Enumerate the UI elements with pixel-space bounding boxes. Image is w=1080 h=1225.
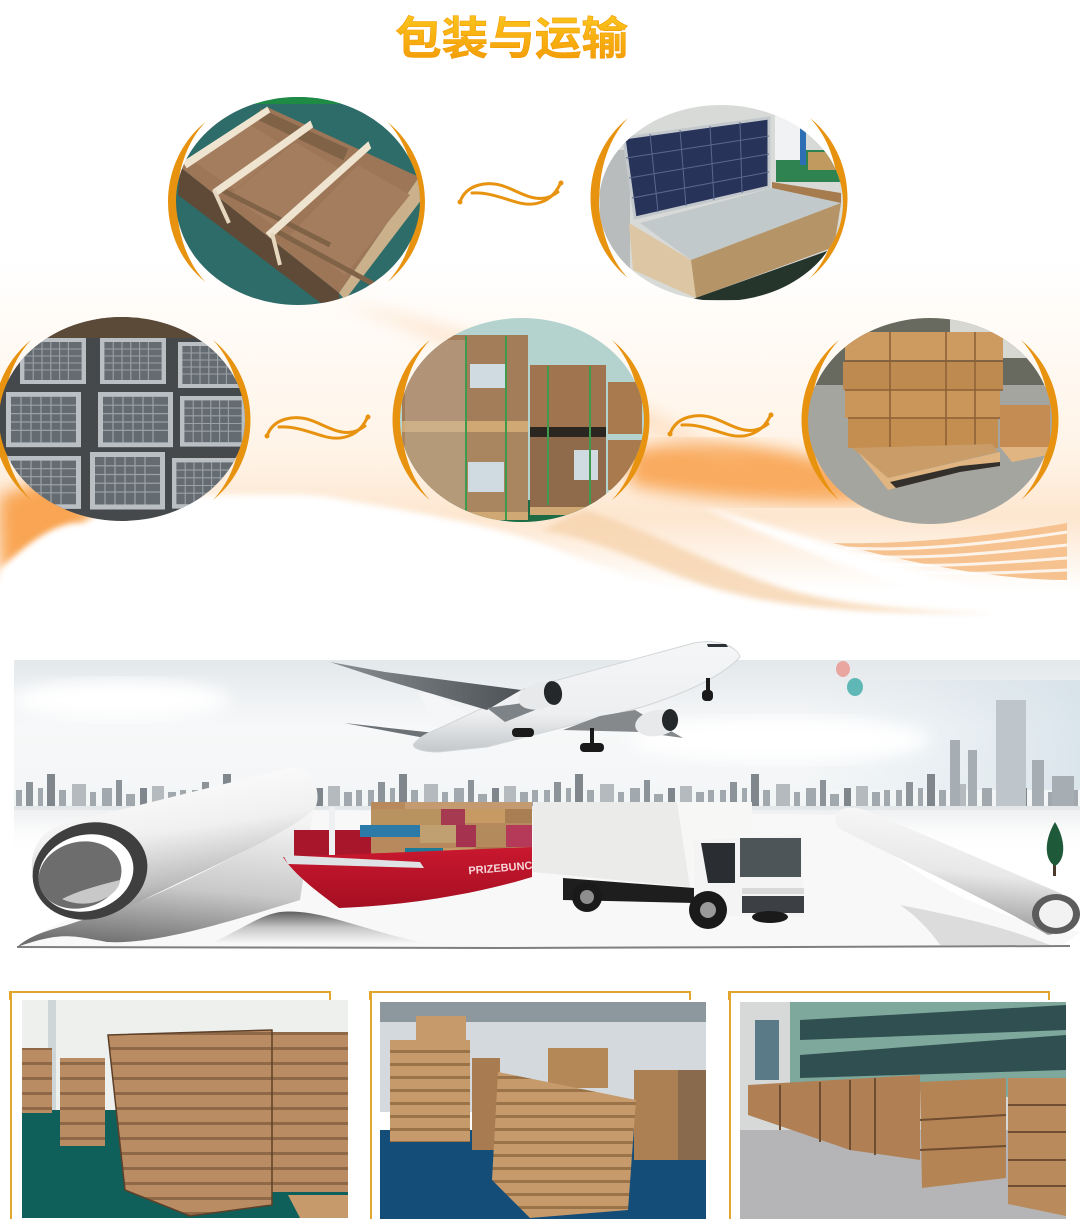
- photo circle: cartons on pallet: [802, 315, 1058, 525]
- paper sheet: [17, 810, 1080, 947]
- orange arcs: [392, 340, 650, 500]
- cargo ship: [283, 802, 548, 908]
- photo circle: palletised cartons: [392, 315, 650, 525]
- background swooshes: [0, 260, 1080, 640]
- city skyline: [14, 700, 1080, 806]
- photo circle: panel in box: [590, 100, 850, 305]
- curl arrow 2: [265, 415, 370, 438]
- curl arrow 1: [458, 181, 563, 204]
- orange arcs: [0, 340, 250, 500]
- title: 包装与运输: [395, 13, 628, 64]
- airplane: [330, 642, 740, 752]
- bottom photo 3: outdoor cartons: [729, 992, 1066, 1219]
- curl arrow 3: [668, 413, 773, 436]
- sky: [14, 660, 1080, 810]
- right paper roll: [835, 808, 1080, 935]
- sheet fold shadow: [210, 912, 430, 944]
- truck: [533, 802, 804, 929]
- transport scene: [10, 642, 1080, 948]
- orange arcs: [590, 118, 848, 278]
- bottom photo 2: warehouse stacks: [370, 992, 706, 1220]
- photo circle: wooden crate lid: [168, 95, 425, 310]
- ground reflection: [14, 806, 1080, 852]
- bottom photo 1: stacked panels indoors: [10, 992, 348, 1219]
- orange arcs: [802, 340, 1058, 500]
- photo circle: small panels: [0, 315, 250, 525]
- orange arcs: [168, 122, 425, 282]
- left paper roll: [17, 767, 318, 947]
- tree: [1047, 822, 1063, 876]
- balloons: [836, 661, 863, 696]
- cargo ship: PRIZEBUNCES: [468, 859, 548, 877]
